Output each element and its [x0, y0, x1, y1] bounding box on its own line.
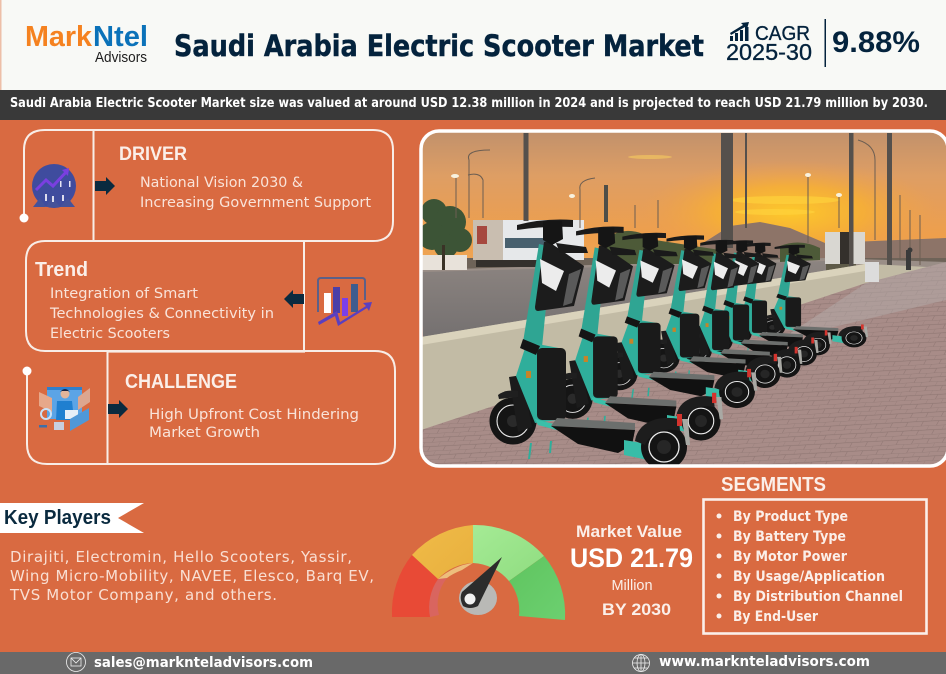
photo: electric scooters parked at sunset — [418, 131, 946, 470]
logo: MarkNtel Advisors: Mark — [25, 21, 93, 53]
arrow — [95, 177, 115, 195]
text: Technologies & Connectivity in — [49, 306, 274, 322]
footer — [0, 652, 946, 674]
icon: analyst — [39, 387, 90, 431]
text: High Upfront Cost Hindering — [149, 407, 359, 423]
logo: MarkNtel Advisors: Ntel — [93, 21, 148, 53]
logo: MarkNtel Advisors: Advisors — [95, 49, 147, 66]
CAGR label: 2025-30 — [726, 39, 812, 65]
market value — [570, 523, 693, 619]
segments list: By Usage/Application — [733, 569, 885, 585]
CAGR label — [726, 23, 812, 65]
panel: trend — [26, 241, 372, 352]
logo: MarkNtel Advisors — [25, 21, 148, 66]
title: Saudi Arabia Electric Scooter Market — [174, 29, 704, 63]
website: www.marknteladvisors.com — [659, 654, 870, 670]
text: Electric Scooters — [50, 326, 170, 342]
key players list: Dirajiti, Electromin, Hello Scooters, Yassir, — [10, 548, 352, 566]
CAGR label: CAGR — [755, 23, 810, 45]
CAGR value: 9.88% — [832, 26, 920, 59]
key players list: Wing Micro-Mobility, NAVEE, Elesco, Barq EV, — [10, 567, 374, 585]
market value: USD 21.79 — [570, 543, 693, 573]
segments heading: SEGMENTS — [721, 474, 826, 496]
market value: BY 2030 — [602, 601, 671, 619]
panel: driver — [20, 130, 393, 241]
key players list: TVS Motor Company, and others. — [9, 586, 277, 604]
text: Increasing Government Support — [140, 195, 371, 211]
icon: growth chart — [730, 22, 749, 41]
segments list: By Product Type — [733, 509, 848, 525]
segments list: By Motor Power — [733, 549, 847, 565]
header bar — [0, 0, 946, 90]
key players ribbon — [0, 503, 144, 533]
email: sales@marknteladvisors.com — [94, 655, 313, 671]
text — [149, 407, 359, 441]
key players ribbon: Key Players — [4, 507, 111, 529]
icon: bar chart — [318, 278, 372, 326]
market value: Market Value — [576, 523, 682, 541]
key players list — [9, 548, 374, 604]
text — [49, 286, 274, 342]
heading: DRIVER — [119, 143, 187, 165]
text: National Vision 2030 & — [140, 175, 303, 191]
arrow — [108, 400, 128, 418]
text: Market Growth — [149, 425, 260, 441]
segments list: By Distribution Channel — [733, 589, 903, 605]
arrow — [284, 290, 304, 308]
trees — [422, 199, 472, 255]
segments list: By Battery Type — [733, 529, 846, 545]
text — [140, 175, 371, 211]
icon: vision globe — [32, 164, 76, 208]
market value: Million — [611, 578, 653, 594]
heading: Trend — [35, 259, 88, 281]
segments list — [704, 500, 926, 634]
panel: challenge — [22, 351, 395, 464]
heading: CHALLENGE — [125, 371, 237, 393]
summary band — [0, 90, 946, 120]
icon: globe — [632, 654, 650, 672]
icon: mail — [66, 652, 86, 672]
trucks — [503, 220, 584, 260]
segments list: By End-User — [733, 609, 818, 625]
text: Integration of Smart — [50, 286, 198, 302]
gauge — [392, 525, 565, 620]
